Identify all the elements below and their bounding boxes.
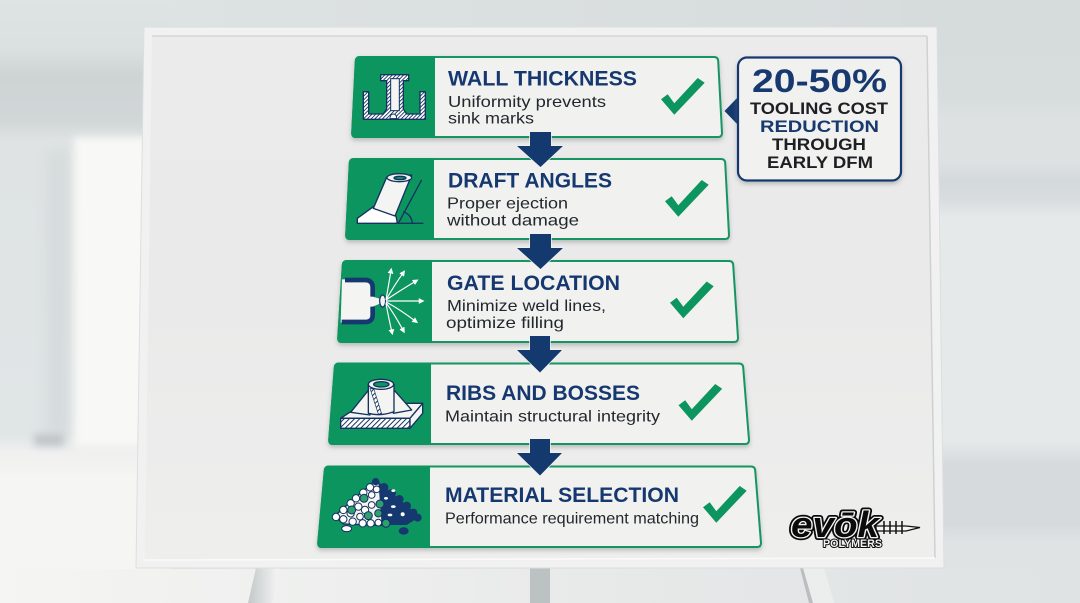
arrow: gate location to ribs and bosses [517,336,562,372]
heading: ribs and bosses: RIBS AND BOSSES [446,382,640,405]
arrow: wall thickness to draft angles [517,132,563,167]
heading: gate location: GATE LOCATION [447,272,620,295]
easel legs [248,568,834,603]
text: ribs and bosses detail: Maintain structural integrity [445,408,660,426]
logo wordmark: evōk [791,504,881,545]
icon: rib and boss part [341,379,423,428]
card: material selection [317,466,761,548]
text: wall thickness detail: sink marks [448,110,534,128]
icon: injection gate flow [341,271,422,332]
icon: check mark [678,384,722,421]
card: ribs and bosses [328,362,749,445]
callout text: REDUCTION [760,118,879,136]
logo: evok polymers [791,504,920,550]
card: wall thickness [351,56,722,138]
text: wall thickness detail [448,94,606,128]
text: material selection detail: Performance requirement matching [445,510,699,528]
icon: draft angle part [357,174,423,223]
logo wordmark: evōk [791,504,881,545]
heading: wall thickness: WALL THICKNESS [448,68,637,90]
text: gate location detail: Minimize weld lines, [447,298,606,315]
callout text: THROUGH [772,136,866,154]
text: draft angles detail: Proper ejection [447,196,568,212]
text: wall thickness detail: Uniformity prevents [448,94,606,111]
callout text: EARLY DFM [767,154,873,172]
icon: check mark [661,78,705,115]
icon: check mark [703,486,747,523]
heading: draft angles: DRAFT ANGLES [448,170,612,192]
logo wordmark: evōk [791,504,881,545]
callout: tooling cost reduction [724,58,901,180]
card: gate location [337,260,738,343]
card: draft angles [345,158,729,240]
callout figure: 20-50% [752,63,887,99]
icon: wall cross-section [363,75,425,119]
text: gate location detail: optimize filling [446,315,564,332]
icon: check mark [670,282,714,318]
callout text: TOOLING COST [750,100,888,118]
logo screw [876,521,920,534]
icon: polymer pellets pile [332,478,422,535]
text: gate location detail [446,298,606,332]
logo subtitle: POLYMERS [823,538,882,550]
icon: check mark [665,180,709,217]
whiteboard [136,27,944,568]
text: draft angles detail: without damage [446,212,579,230]
arrow: draft angles to gate location [517,234,563,269]
heading: material selection: MATERIAL SELECTION [445,484,679,507]
callout text [750,100,888,172]
text: draft angles detail [446,196,579,230]
arrow: ribs and bosses to material selection [517,439,562,476]
